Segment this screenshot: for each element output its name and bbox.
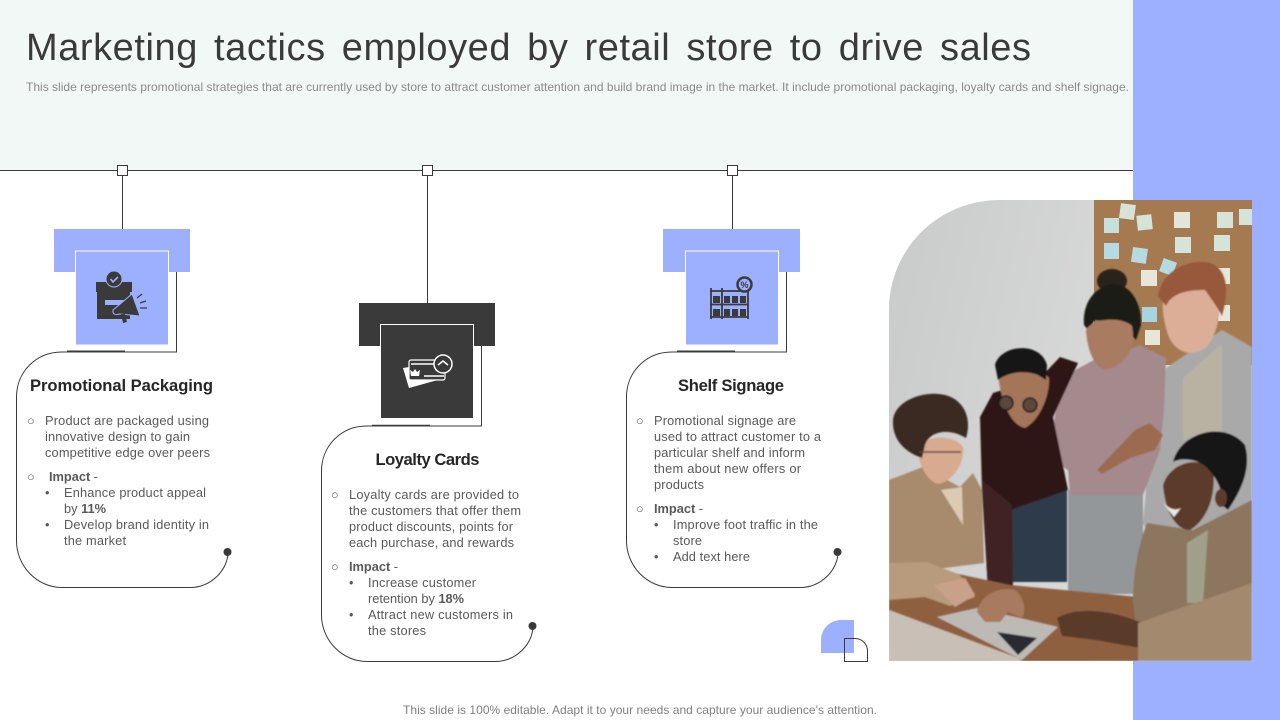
header block — [359, 303, 495, 346]
impact list: Impact - — [349, 559, 398, 574]
card outline — [322, 346, 533, 662]
subtitle: This slide represents promotional strategies that are currently used by store to attract customer attention and build brand image in the market. It include promotional packaging, loyalty cards and shelf signage. — [26, 80, 1129, 94]
end dot — [528, 622, 536, 630]
card heading: Promotional Packaging — [30, 376, 213, 395]
icon: box with megaphone — [96, 271, 147, 323]
icon: shelf with percent tag: % — [740, 280, 749, 290]
impact list: ○ — [27, 469, 35, 484]
impact list: • — [349, 575, 353, 590]
icon tile — [76, 251, 168, 345]
impact list: by 11% — [64, 501, 107, 516]
impact list: Improve foot traffic in the — [673, 517, 818, 532]
end dot — [224, 548, 232, 556]
woman in mauve sweater — [1052, 269, 1166, 594]
description: products — [654, 477, 704, 492]
description: the customers that offer them — [349, 503, 521, 518]
description: each purchase, and rewards — [349, 535, 514, 550]
impact list — [27, 469, 209, 548]
icon tile — [380, 324, 474, 418]
cork board with sticky notes — [1094, 200, 1252, 365]
impact list: Impact - — [49, 469, 98, 484]
description: Promotional signage are — [654, 413, 796, 428]
description: product discounts, points for — [349, 519, 514, 534]
impact list: ○ — [636, 501, 644, 516]
title: Marketing tactics employed by retail store to drive sales — [26, 27, 1031, 69]
description — [27, 413, 210, 460]
accent stroke — [67, 350, 125, 352]
icon tile — [686, 251, 778, 345]
icon: shelf with percent tag — [710, 278, 752, 319]
impact list: ○ — [331, 559, 339, 574]
impact list: • — [654, 517, 658, 532]
description: ○ — [331, 487, 339, 502]
impact list: Increase customer — [368, 575, 477, 590]
footer note: This slide is 100% editable. Adapt it to your needs and capture your audience's attention. — [403, 703, 877, 717]
impact list: • — [45, 517, 49, 532]
man in tan jacket — [1057, 431, 1252, 661]
description: Product are packaged using — [45, 413, 209, 428]
card heading: Shelf Signage — [678, 376, 784, 395]
red haired man — [1143, 262, 1252, 540]
laptop — [889, 589, 1058, 661]
accent stroke — [677, 350, 735, 352]
icon: loyalty cards — [403, 355, 452, 388]
impact list: Add text here — [673, 549, 750, 564]
impact list — [331, 559, 513, 638]
photo: team around a laptop — [889, 200, 1252, 661]
decorative corner shapes — [821, 620, 868, 662]
header panel — [0, 0, 1133, 170]
description — [331, 487, 521, 550]
header block — [54, 229, 190, 272]
card heading: Loyalty Cards — [376, 450, 480, 469]
impact list: • — [45, 485, 49, 500]
description: used to attract customer to a — [654, 429, 822, 444]
description: particular shelf and inform — [654, 445, 805, 460]
timeline with connectors — [0, 166, 1133, 304]
description: ○ — [27, 413, 35, 428]
header block — [663, 229, 800, 272]
wooden table — [889, 573, 1139, 661]
description: them about new offers or — [654, 461, 802, 476]
impact list: • — [654, 549, 658, 564]
impact list: Impact - — [654, 501, 703, 516]
description: Loyalty cards are provided to — [349, 487, 519, 502]
woman with curly hair — [889, 394, 984, 607]
description — [636, 413, 822, 492]
panel: loyalty cards — [322, 303, 536, 662]
impact list: Enhance product appeal — [64, 485, 206, 500]
impact list: Develop brand identity in — [64, 517, 209, 532]
impact list: Attract new customers in — [368, 607, 513, 622]
description: competitive edge over peers — [45, 445, 210, 460]
accent stroke — [372, 424, 430, 426]
description: ○ — [636, 413, 644, 428]
right accent band — [1133, 0, 1280, 720]
end dot — [834, 548, 842, 556]
description: innovative design to gain — [45, 429, 190, 444]
impact list: • — [349, 607, 353, 622]
man in dark sweater with glasses — [980, 348, 1078, 590]
panel: promotional packaging — [16, 229, 232, 588]
impact list: the stores — [368, 623, 426, 638]
impact list — [636, 501, 818, 564]
card outline — [16, 272, 228, 588]
impact list: the market — [64, 533, 126, 548]
card outline — [626, 272, 838, 588]
panel: shelf signage — [626, 229, 842, 588]
impact list: retention by 18% — [368, 591, 465, 606]
impact list: store — [673, 533, 702, 548]
